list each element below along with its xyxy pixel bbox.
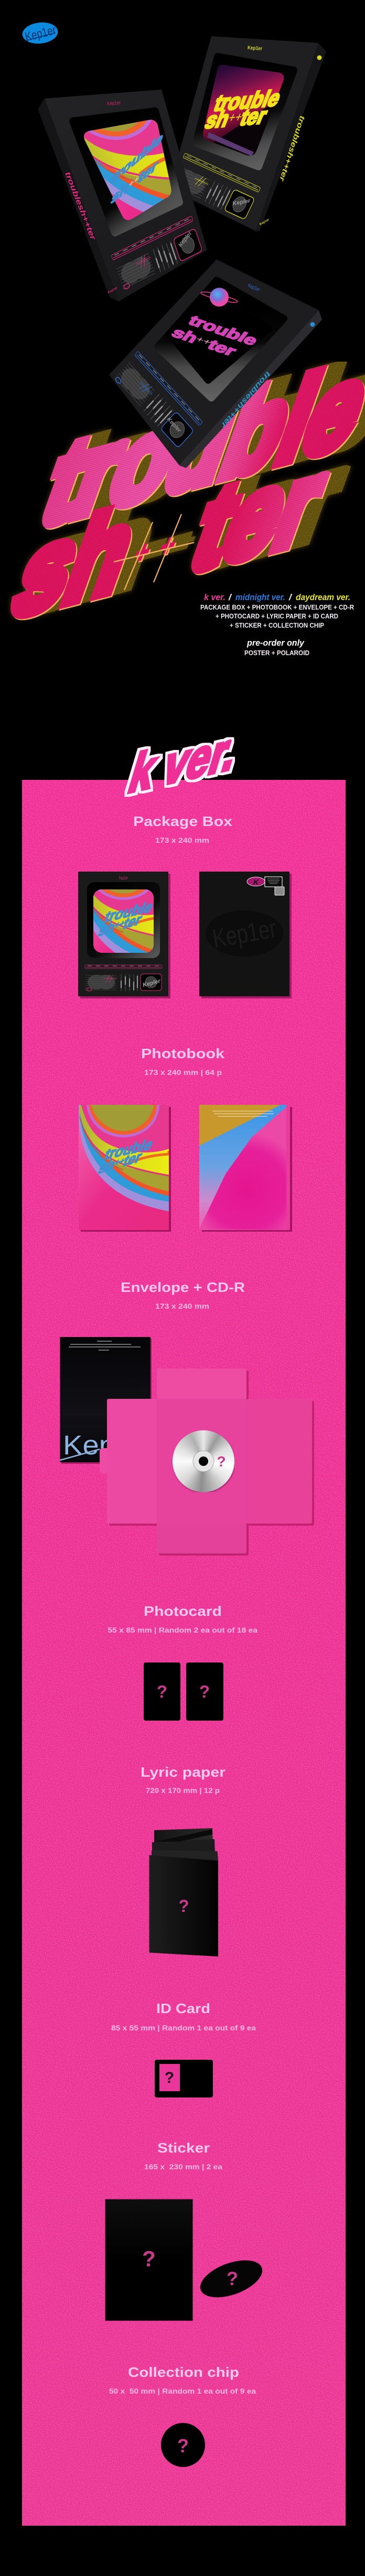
screen title [168, 313, 261, 359]
title: Photocard [144, 1603, 222, 1619]
pre-order heading: pre-order only [246, 638, 305, 648]
card 2: ? [199, 1682, 210, 1701]
spine title: troublesh++ter [219, 370, 273, 430]
book front cover: ter [121, 1148, 145, 1170]
box front: trouble [102, 898, 156, 926]
card 2 [186, 1662, 223, 1721]
version line: daydream ver. [296, 592, 350, 602]
control panel [113, 351, 202, 449]
heading: k ver.: k ver. [122, 719, 246, 805]
card 1: ? [157, 1682, 167, 1701]
version line [204, 592, 350, 602]
screen title: ter [136, 156, 160, 188]
box front: ter [121, 910, 145, 933]
screen title: ter [237, 103, 271, 131]
section: sticker [105, 2140, 267, 2321]
screen title: ++ [127, 172, 141, 191]
section: photocard [108, 1603, 258, 1721]
version and contents info [200, 592, 354, 657]
folded lyric stack: ? [178, 1896, 189, 1916]
size: 173 x 240 mm | 64 p [144, 1069, 222, 1077]
book front cover: ++ [113, 1155, 127, 1168]
version and contents info: + PHOTOCARD + LYRIC PAPER + ID CARD [216, 613, 338, 620]
spine icon [310, 322, 315, 327]
title: Photobook [141, 1046, 225, 1061]
version line: midnight ver. [235, 592, 285, 602]
envelope flaps [107, 1368, 312, 1553]
version line: k ver. [204, 592, 226, 602]
size: 165 x 230 mm | 2 ea [144, 2163, 223, 2171]
section: envelope and CD-R [60, 1279, 314, 1556]
screen title: ++ [226, 109, 245, 126]
size: 720 x 170 mm | 12 p [146, 1787, 220, 1795]
section: lyric paper [141, 1764, 226, 1957]
TV window [73, 111, 179, 233]
book front cover: trouble [102, 1136, 156, 1164]
box front: Kepler [142, 978, 162, 988]
pre-order items: POSTER + POLAROID [244, 649, 309, 657]
section: package box [78, 813, 292, 998]
rectangular sticker [105, 2199, 193, 2321]
planet [200, 288, 238, 307]
title: Package Box [133, 813, 233, 829]
oval sticker: ? [227, 2268, 238, 2289]
spine logo: Kep1er [108, 286, 119, 295]
box front: Kep1er [119, 875, 128, 881]
section: ID card [111, 2001, 256, 2097]
box spine [179, 310, 322, 468]
size: 55 x 85 mm | Random 2 ea out of 18 ea [108, 1626, 258, 1634]
spine logo: Kep1er [259, 218, 270, 226]
card: ? [165, 2069, 174, 2086]
spine icon [317, 56, 322, 60]
screen title: sh [201, 106, 234, 133]
section: collection chip [109, 2364, 256, 2467]
black insert sheet: Kep [63, 1430, 115, 1461]
panel: k ver. contents [22, 780, 346, 2526]
screen title: ter [205, 337, 240, 359]
spine title: troublesh++ter [63, 170, 98, 242]
screen title: trouble [109, 128, 165, 189]
version line: / [288, 592, 293, 602]
rectangular sticker: ? [142, 2246, 156, 2271]
box front: ++ [113, 918, 127, 931]
box front [169, 36, 318, 231]
box back: Kep1er [210, 914, 278, 953]
chip [161, 2423, 205, 2467]
title: ID Card [156, 2001, 210, 2016]
chip: ? [177, 2435, 189, 2457]
screen art [203, 65, 284, 156]
envelope left tab [100, 1448, 107, 1473]
box back [199, 872, 292, 998]
title cross lines [114, 514, 194, 590]
top logo: Kep1er [107, 100, 121, 107]
screen [169, 294, 269, 380]
book front cover [79, 1105, 171, 1232]
version and contents info: + STICKER + COLLECTION CHIP [230, 622, 324, 629]
title: Collection chip [128, 2364, 239, 2380]
screen title: sh [109, 178, 131, 208]
album box: k ver. (pink) [38, 87, 222, 301]
box spine [38, 99, 119, 301]
box front [45, 90, 207, 301]
spine title: troublesh++ter [277, 115, 307, 183]
top logo: Kep1er [247, 282, 261, 293]
title line 2: + [130, 532, 156, 571]
screen title: sh [168, 325, 201, 346]
TV window [158, 280, 284, 398]
album box: midnight ver. (blue) [109, 259, 322, 468]
icon: CD [173, 1430, 234, 1492]
contents list: PACKAGE BOX + PHOTOBOOK + ENVELOPE + CD-R [200, 604, 354, 611]
screen title: trouble [210, 85, 285, 116]
title: Sticker [157, 2140, 210, 2156]
envelope shadow [109, 1371, 314, 1556]
logo: Kep1er ellipse: Kep1er [24, 23, 58, 45]
title: Lyric paper [141, 1764, 226, 1780]
box front [78, 867, 170, 998]
title line 2: + [155, 526, 181, 564]
screen title: ++ [194, 334, 213, 347]
box front: sh [95, 918, 118, 940]
book back cover [199, 1105, 292, 1232]
screen title: trouble [185, 313, 261, 349]
album box: daydream ver. (yellow) [169, 36, 326, 231]
badge logo: Kepler [166, 416, 182, 434]
icon: CD: ? [217, 1453, 226, 1470]
title line 2: sh [0, 481, 153, 643]
size: 50 x 50 mm | Random 1 ea out of 9 ea [109, 2387, 256, 2395]
book front cover: sh [95, 1156, 118, 1178]
control panel [169, 153, 261, 221]
TV window [196, 57, 294, 167]
size: 173 x 240 mm [155, 836, 209, 844]
card [155, 2060, 213, 2097]
size: 173 x 240 mm [155, 1302, 209, 1310]
folded lyric stack [149, 1828, 218, 1957]
black insert sheet [60, 1337, 152, 1464]
oval sticker [195, 2253, 267, 2305]
title line 2: ter [177, 433, 342, 597]
version line: / [228, 592, 232, 602]
size: 85 x 55 mm | Random 1 ea out of 9 ea [111, 2024, 256, 2032]
title: Envelope + CD-R [121, 1279, 245, 1295]
badge logo: Kepler [232, 198, 251, 207]
screen title [201, 85, 285, 133]
section: photobook [79, 1046, 292, 1232]
box back: K [253, 878, 259, 886]
top logo: Kep1er [248, 45, 262, 52]
card 1 [144, 1662, 180, 1721]
control panel [111, 216, 203, 290]
big title: trouble sh++ter [0, 335, 365, 643]
box spine [256, 43, 326, 231]
screen art [84, 119, 171, 220]
badge logo: Kepler [177, 230, 194, 248]
box front [109, 259, 319, 465]
